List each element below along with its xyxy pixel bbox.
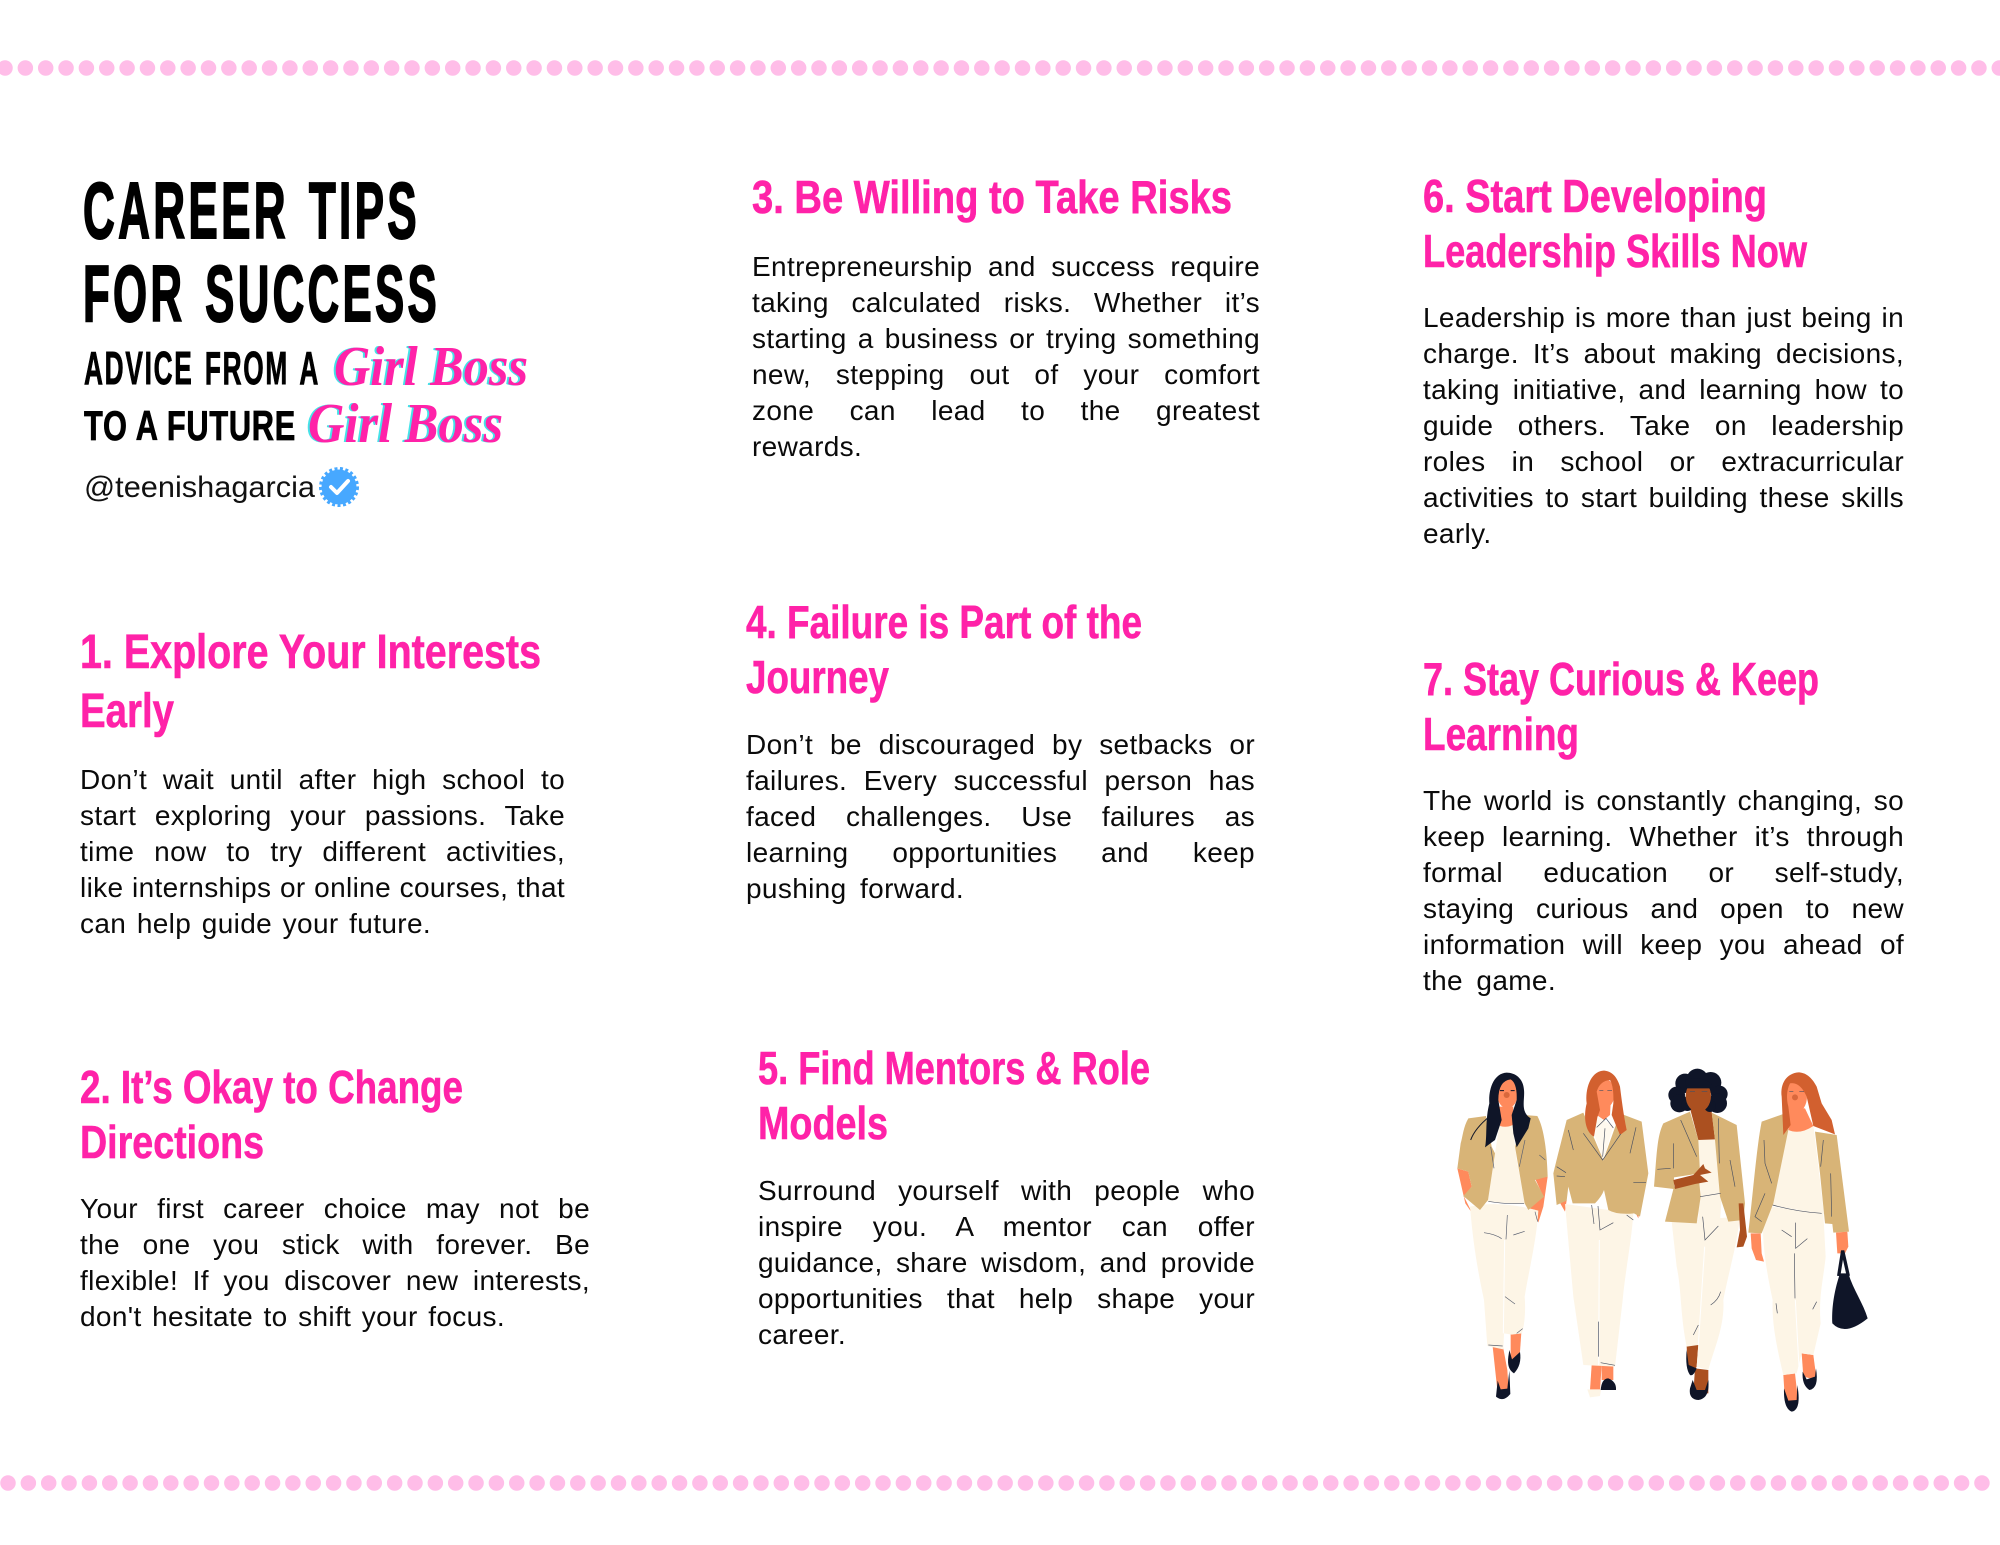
body text (1423, 785, 1904, 996)
body text: Entrepreneurship and success require (752, 251, 1260, 282)
body text: inspire you. A mentor can offer (758, 1211, 1255, 1242)
body text: rewards. (752, 431, 862, 462)
subtitle line one: ADVICE FROM A (84, 342, 320, 394)
woman 3 (1654, 1069, 1747, 1400)
body text: keep learning. Whether it’s through (1423, 821, 1904, 852)
woman 1 (1457, 1073, 1548, 1399)
body text: flexible! If you discover new interests, (80, 1265, 590, 1296)
body text: taking initiative, and learning how to (1423, 374, 1904, 405)
heading: 3. Be Willing to Take Risks (752, 171, 1232, 223)
heading: 1. Explore Your Interests (80, 626, 541, 679)
body text: early. (1423, 518, 1492, 549)
subtitle line two: TO A FUTURE (84, 402, 296, 449)
heading (80, 626, 541, 738)
body text: information will keep you ahead of (1423, 929, 1904, 960)
bottom dotted border (0, 1475, 1990, 1491)
body text: zone can lead to the greatest (752, 395, 1260, 426)
body text: guide others. Take on leadership (1423, 410, 1904, 441)
top dotted border (0, 60, 2000, 76)
body text (758, 1175, 1255, 1350)
handle: @teenishagarcia (84, 471, 315, 504)
title: for success: FOR SUCCESS (83, 249, 440, 338)
body text: Leadership is more than just being in (1423, 302, 1904, 333)
body text: activities to start building these skills (1423, 482, 1904, 513)
body text (80, 764, 565, 939)
title block (83, 166, 528, 507)
body text: the one you stick with forever. Be (80, 1229, 590, 1260)
script: girl boss two: Girl Boss (308, 393, 503, 455)
body text: staying curious and open to new (1423, 893, 1904, 924)
body text: like internships or online courses, that (80, 872, 565, 903)
body text: can help guide your future. (80, 908, 431, 939)
tip 2 (80, 1061, 590, 1332)
body text: Don’t wait until after high school to (80, 764, 565, 795)
body text: failures. Every successful person has (746, 765, 1255, 796)
heading: 6. Start Developing (1423, 170, 1767, 222)
tip 6 (1423, 170, 1904, 549)
body text (752, 251, 1260, 462)
heading (80, 1061, 463, 1168)
body text: pushing forward. (746, 873, 964, 904)
script: girl boss one: Girl Boss (334, 336, 528, 398)
illustration: four businesswomen walking (1457, 1068, 1868, 1412)
body text: opportunities that help shape your (758, 1283, 1255, 1314)
heading: 2. It’s Okay to Change (80, 1061, 463, 1113)
heading: Models (758, 1097, 888, 1149)
body text: faced challenges. Use failures as (746, 801, 1255, 832)
body text: time now to try different activities, (80, 836, 565, 867)
body text: learning opportunities and keep (746, 837, 1255, 868)
body text (746, 729, 1255, 904)
body text: taking calculated risks. Whether it’s (752, 287, 1260, 318)
heading: Early (80, 685, 174, 738)
body text: formal education or self-study, (1423, 857, 1904, 888)
heading (758, 1042, 1150, 1149)
body text: Your first career choice may not be (80, 1193, 590, 1224)
body text: guidance, share wisdom, and provide (758, 1247, 1255, 1278)
heading: 7. Stay Curious & Keep (1423, 653, 1819, 705)
body text: The world is constantly changing, so (1423, 785, 1904, 816)
tip 7 (1423, 653, 1904, 996)
heading: Learning (1423, 708, 1579, 760)
woman 2 (1553, 1071, 1648, 1397)
body text: charge. It’s about making decisions, (1423, 338, 1904, 369)
tip 3 (752, 171, 1260, 462)
tip 4 (746, 596, 1255, 904)
body text: don't hesitate to shift your focus. (80, 1301, 505, 1332)
body text: new, stepping out of your comfort (752, 359, 1260, 390)
body text: roles in school or extracurricular (1423, 446, 1904, 477)
body text: Surround yourself with people who (758, 1175, 1255, 1206)
title: career tips: CAREER TIPS (83, 166, 420, 255)
heading (746, 596, 1142, 703)
body text: the game. (1423, 965, 1556, 996)
body text (1423, 302, 1904, 549)
tip 1 (80, 626, 565, 939)
heading (1423, 170, 1808, 277)
heading: Directions (80, 1116, 264, 1168)
body text: start exploring your passions. Take (80, 800, 565, 831)
body text: Don’t be discouraged by setbacks or (746, 729, 1255, 760)
body text: starting a business or trying something (752, 323, 1260, 354)
body text: career. (758, 1319, 846, 1350)
woman 4 (1748, 1072, 1868, 1412)
icon: verified badge (320, 468, 358, 506)
heading: Leadership Skills Now (1423, 225, 1807, 277)
heading: 4. Failure is Part of the (746, 596, 1142, 648)
heading (1423, 653, 1819, 760)
heading: Journey (746, 651, 889, 703)
tip 5 (758, 1042, 1255, 1350)
heading: 5. Find Mentors & Role (758, 1042, 1150, 1094)
body text (80, 1193, 590, 1332)
